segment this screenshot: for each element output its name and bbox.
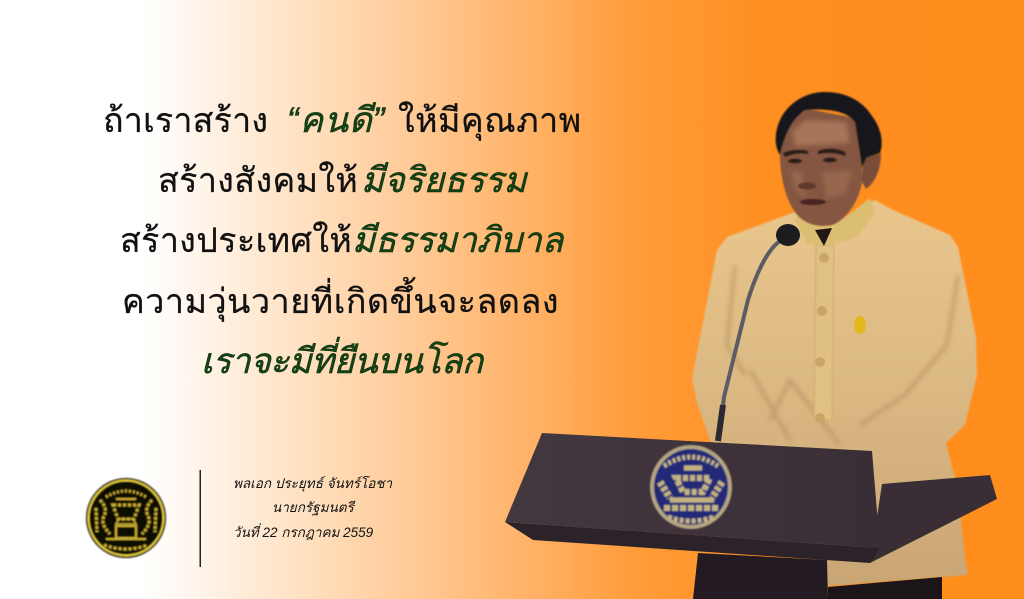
quote text: มีธรรมาภิบาล xyxy=(352,221,565,260)
jacket xyxy=(692,200,977,586)
signature text: พลเอก ประยุทธ์ จันทร์โอชา xyxy=(233,475,392,492)
lectern wing xyxy=(870,475,997,563)
buttons xyxy=(815,253,829,423)
forehead and cheeks xyxy=(792,120,850,146)
quote text: มีจริยธรรม xyxy=(361,161,529,200)
quote text xyxy=(103,101,582,381)
emblem: government seal xyxy=(86,478,166,558)
pin xyxy=(854,316,866,334)
lectern underside xyxy=(505,522,880,563)
face xyxy=(780,108,863,226)
microphone xyxy=(719,240,782,441)
facial features xyxy=(783,149,846,205)
quote text: สร้างสังคมให้ xyxy=(158,161,358,200)
quote text: เราจะมีที่ยืนบนโลก xyxy=(201,337,485,381)
sleeve shadows xyxy=(727,265,958,445)
quote text: สร้างประเทศให้ xyxy=(120,221,352,260)
stand and trousers xyxy=(693,553,828,599)
quote text: “คนดี” xyxy=(287,101,386,140)
ear xyxy=(861,153,881,189)
signature text xyxy=(233,475,392,540)
lectern top xyxy=(505,433,880,548)
divider xyxy=(200,470,201,567)
placket xyxy=(814,245,834,420)
quote text: ถ้าเราสร้าง xyxy=(103,102,268,140)
lectern seal xyxy=(650,445,732,529)
hair xyxy=(776,92,882,168)
quote text: ให้มีคุณภาพ xyxy=(398,101,582,141)
quote text: ความวุ่นวายที่เกิดขึ้นจะลดลง xyxy=(122,277,559,322)
signature text: นายกรัฐมนตรี xyxy=(272,500,356,516)
collar xyxy=(795,198,875,245)
signature text: วันที่ 22 กรกฎาคม 2559 xyxy=(233,523,374,540)
photo: prime minister at podium xyxy=(505,92,997,599)
